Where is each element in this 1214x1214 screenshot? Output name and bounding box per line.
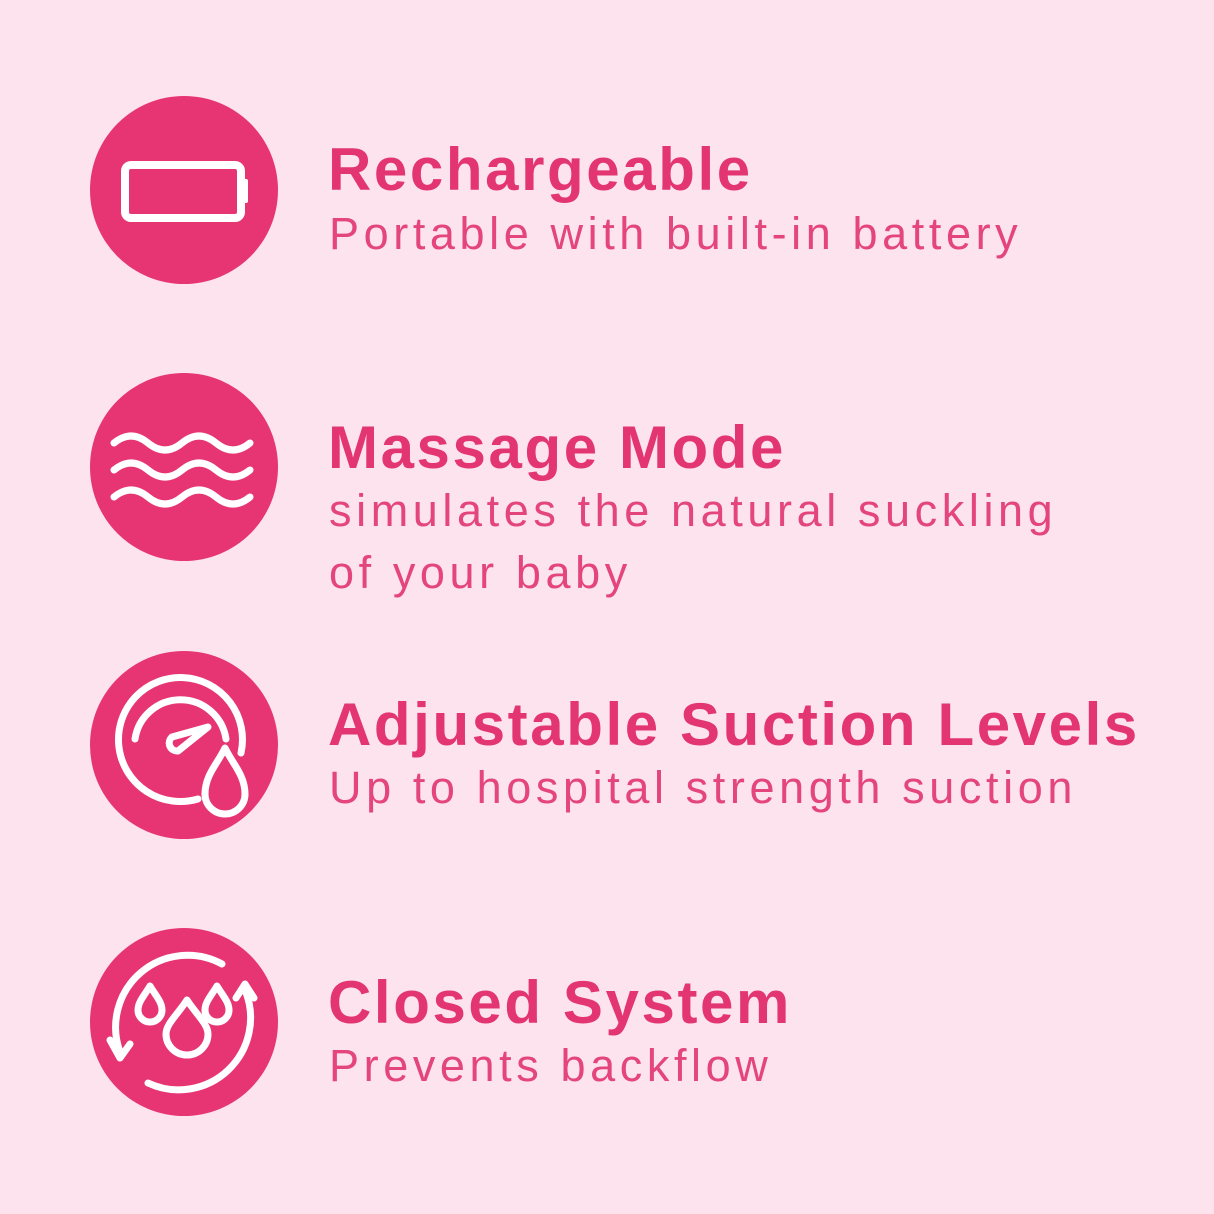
subtitle: suction: Up to hospital strength suction xyxy=(329,762,1077,813)
icon: closed system xyxy=(90,928,278,1116)
icon: battery xyxy=(90,96,278,284)
title: Rechargeable: Rechargeable xyxy=(328,136,753,203)
title: Adjustable Suction Levels: Adjustable Suction Levels xyxy=(328,691,1140,758)
icon: gauge xyxy=(90,651,278,839)
title: Closed System: Closed System xyxy=(328,969,792,1036)
subtitle: massage: simulates the natural suckling xyxy=(329,485,1057,536)
icon: waves xyxy=(90,373,278,561)
subtitle: backflow: Prevents backflow xyxy=(329,1040,772,1091)
title: Massage Mode: Massage Mode xyxy=(328,414,786,481)
subtitle: massage: of your baby xyxy=(329,547,632,598)
subtitle: massage xyxy=(329,485,1057,598)
subtitle: battery: Portable with built-in battery xyxy=(329,208,1022,259)
